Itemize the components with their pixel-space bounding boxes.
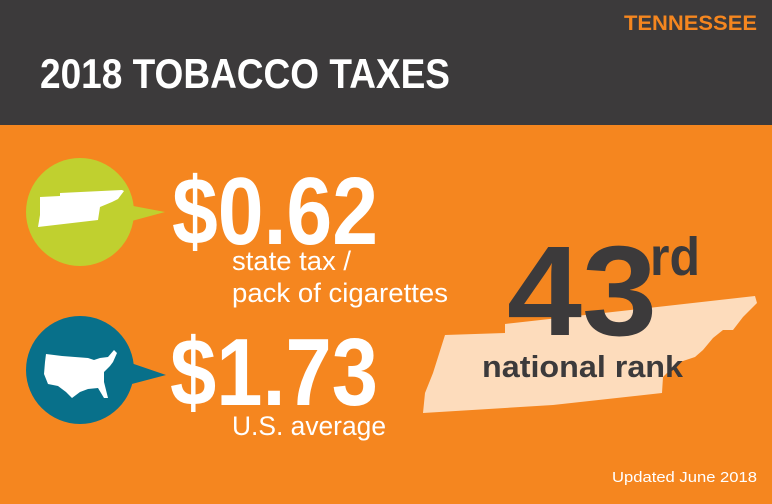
US average figure: $1.73: [170, 319, 378, 426]
title: 2018 TOBACCO TAXES: [40, 50, 450, 97]
footer note: Updated June 2018: [612, 469, 757, 486]
icon: US map in blue bubble: [26, 316, 166, 424]
rank panel with Tennessee silhouette: [423, 220, 757, 413]
state tax figure: pack of cigarettes: [232, 278, 448, 308]
icon: Tennessee state in green bubble: [26, 158, 165, 266]
US average label: U.S. average: [232, 411, 386, 441]
state tax label: state tax /: [232, 246, 352, 276]
rank number: 43: [507, 220, 657, 363]
state tax figure: $0.62: [172, 158, 378, 265]
state label: TENNESSEE: [624, 12, 757, 35]
rank panel with Tennessee silhouette: rd: [650, 227, 700, 287]
rank label: national rank: [482, 349, 684, 384]
state tax figure: [172, 158, 448, 308]
header bar: [0, 0, 772, 125]
